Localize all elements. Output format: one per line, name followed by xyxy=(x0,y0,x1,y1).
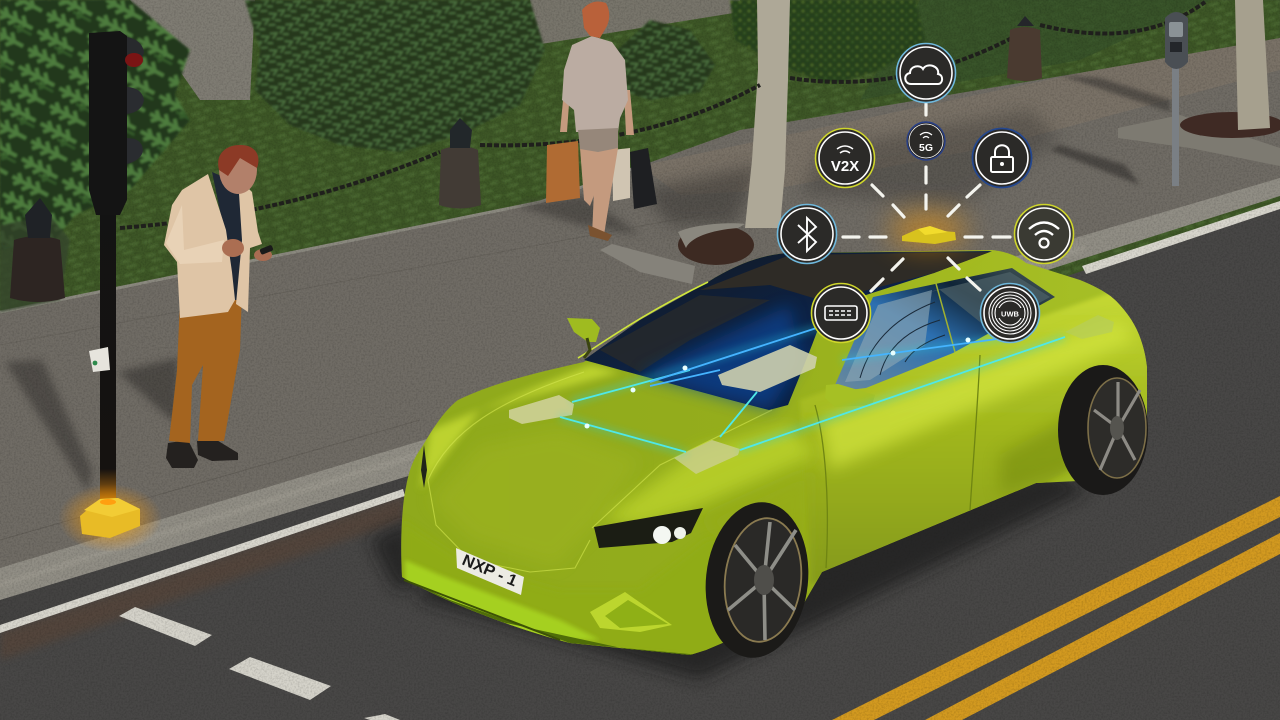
shorts xyxy=(578,128,618,152)
front wheel xyxy=(698,497,816,663)
hedge xyxy=(730,0,925,85)
hands and phone xyxy=(222,239,274,261)
white edge line xyxy=(0,201,1280,633)
small bush behind woman xyxy=(612,20,715,100)
road markings xyxy=(0,201,1280,720)
side mirrors xyxy=(567,318,875,407)
housing xyxy=(89,31,127,215)
background: wall and lawn xyxy=(0,0,1280,340)
woman with shopping bags xyxy=(546,2,657,241)
chain fence xyxy=(120,2,1205,228)
hood and panel lines xyxy=(428,372,772,572)
sensor box xyxy=(89,347,110,372)
pole xyxy=(100,205,116,505)
rear wheel xyxy=(1058,365,1148,495)
headlight xyxy=(421,445,703,548)
man with phone xyxy=(164,145,274,468)
icon: V2X xyxy=(816,128,874,188)
dress xyxy=(562,36,628,132)
jacket xyxy=(164,174,262,318)
white lane dashes xyxy=(119,607,400,720)
shirt under jacket xyxy=(212,172,248,300)
side windows xyxy=(832,268,1055,392)
icon: cloud xyxy=(896,44,956,102)
connectivity node on roof xyxy=(890,212,966,248)
licence plate: NXP - 1 xyxy=(459,552,520,590)
network wires xyxy=(560,323,1065,453)
sidewalk xyxy=(0,38,1280,600)
parking meter xyxy=(1165,12,1188,186)
icon: V2X: V2X xyxy=(831,158,859,175)
lamps xyxy=(125,37,144,164)
head xyxy=(218,145,258,194)
glowing base xyxy=(58,484,162,552)
car shadow xyxy=(370,470,1090,680)
bollards xyxy=(10,16,1042,302)
icon: bluetooth xyxy=(778,204,836,264)
shoes xyxy=(166,439,238,468)
trousers xyxy=(169,290,242,443)
legs xyxy=(580,148,618,236)
road xyxy=(0,180,1280,720)
icon: lock xyxy=(972,128,1032,188)
tree planter mulch xyxy=(600,223,754,284)
icon: wifi xyxy=(1014,204,1074,264)
shopping bags xyxy=(546,141,657,209)
icon: UWB: UWB xyxy=(1001,310,1020,318)
curb xyxy=(0,178,1280,600)
licence plate xyxy=(456,548,524,595)
lower bumper intake xyxy=(404,580,672,640)
sensor modules xyxy=(509,315,1114,474)
body lighting xyxy=(400,280,1147,665)
icon: chip module xyxy=(812,284,870,342)
tree trunk centre xyxy=(745,0,790,228)
large bush xyxy=(245,0,545,152)
roof and windshield glass xyxy=(578,251,992,410)
car body xyxy=(400,250,1147,665)
traffic light xyxy=(58,31,162,552)
jacket arm xyxy=(166,205,224,264)
icon: UWB xyxy=(980,284,1040,342)
icon: 5G: 5G xyxy=(919,142,933,154)
icon: 5G xyxy=(907,122,945,160)
fern tree left xyxy=(0,0,190,312)
sidewalk shadows xyxy=(5,75,1170,492)
arms xyxy=(560,90,634,135)
head xyxy=(582,2,609,38)
dashed connector lines xyxy=(843,104,1010,291)
right planter and tree xyxy=(1118,0,1280,166)
yellow centre lines xyxy=(832,496,1280,720)
